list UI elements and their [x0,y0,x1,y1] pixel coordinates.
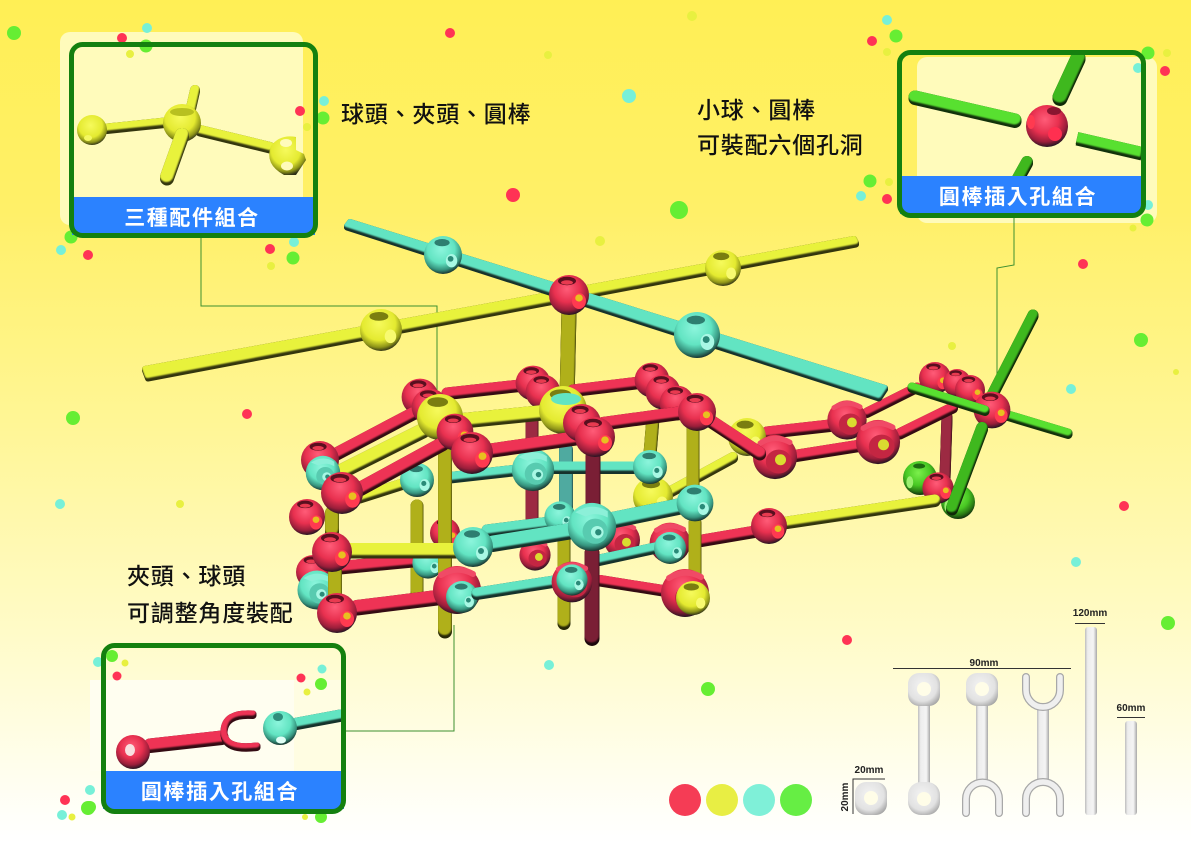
caption: 三種配件組合 [124,207,260,230]
part: clip-clip rod [1026,677,1060,813]
dimension: small ball 20mm: 20mm [855,765,884,776]
label: clip and ball head: 夾頭、球頭 [127,563,246,589]
part: ball-ball rod [908,673,940,815]
part: ball-clip rod [966,673,999,813]
right-side lower rods and tail boom [597,500,935,590]
helicopter model [145,222,1068,637]
parts size chart [840,608,1146,815]
panel backing: rod into hole [917,57,1157,223]
part: 60mm rod [1117,703,1146,815]
label: small ball and rod: 小球、圓棒 [697,97,816,123]
caption bar [72,197,315,235]
main mast [567,310,569,400]
panel: three part assembly [72,44,316,236]
mid teal ring [360,449,667,497]
connector lines from callouts to the model [201,218,1014,731]
front frame: vertical rods [332,430,695,630]
caption: 圓棒插入孔組合 [141,781,299,804]
rotor blade: teal [347,222,885,397]
upper back red ring [337,363,694,470]
caption bar [103,771,344,809]
front top red ring [301,393,716,514]
part: 120mm rod: 120mm [1073,608,1107,619]
dimension: small ball 20mm: 20mm [840,782,851,811]
top rotor [145,222,885,397]
icon: yellow connector assembly [77,90,306,177]
label: six holes: 可裝配六個孔洞 [697,132,864,158]
panel backing: three part assembly [60,32,303,225]
tail section: clips and red rods [710,362,985,479]
panel: clip and ball joint [103,646,344,812]
tail rotor [912,315,1068,508]
panel: rod into hole, ball [900,52,1144,216]
icon: red clip and teal ball [116,711,340,769]
caption: 圓棒插入孔組合 [939,186,1097,209]
part: 120mm rod [1073,608,1107,815]
front lower teal assembly [312,485,713,637]
label: adjustable angle: 可調整角度裝配 [127,600,294,626]
bottom frame [317,562,710,633]
caption bar [900,176,1142,214]
rotor blade: yellow [145,239,856,377]
tail rear strut and green balls [903,417,975,519]
dimension: small ball 20mm [840,765,887,815]
colour swatches [669,784,812,816]
panel backing: clip and ball [90,680,343,771]
lower back ring [289,499,690,610]
back-side vertical rods [417,417,733,622]
icon: green rods around red ball [915,58,1142,180]
dimension: 90mm: 90mm [970,658,999,669]
label: parts: 球頭、夾頭、圓棒 [341,101,531,127]
part: 60mm rod: 60mm [1117,703,1146,714]
